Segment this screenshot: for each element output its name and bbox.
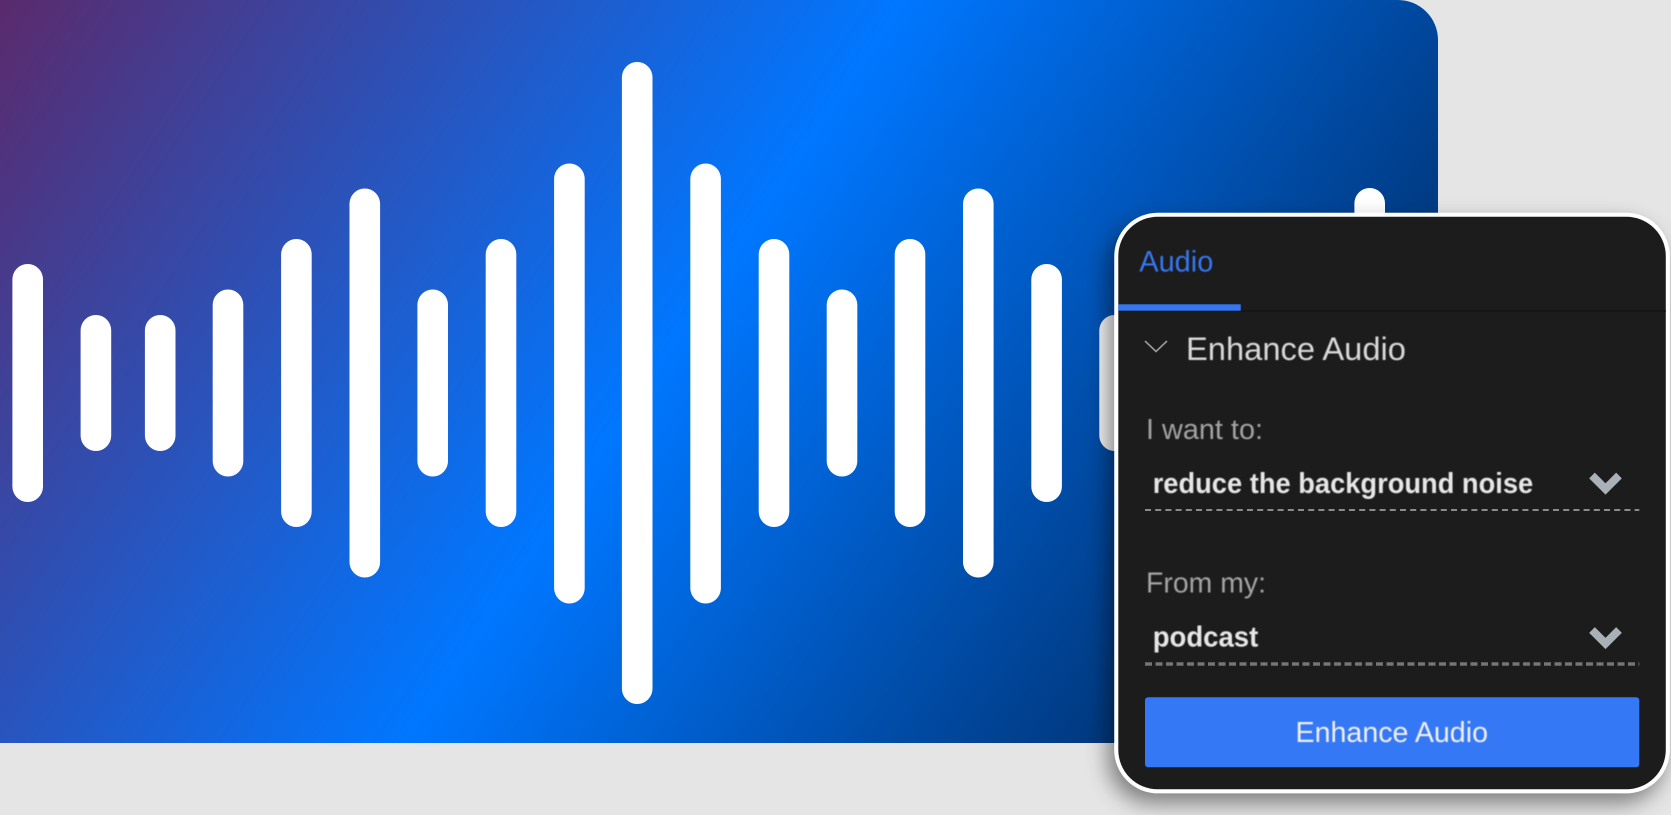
dropdown underline	[1145, 662, 1639, 666]
panel: audio settings	[1116, 215, 1668, 791]
panel: gradient background card	[0, 0, 1438, 743]
panel background	[1116, 215, 1668, 791]
icon: section chevron	[1145, 341, 1167, 352]
field label: I want to: I want to:	[1146, 414, 1263, 446]
tab divider	[1118, 310, 1666, 312]
dropdown value: reduce the background noise: reduce the background noise	[1153, 468, 1533, 500]
tab label: Audio: Audio	[1139, 246, 1213, 279]
button: Enhance Audio	[1145, 697, 1639, 767]
chart: audio waveform bars	[12, 62, 1385, 704]
button: Enhance Audio: Enhance Audio	[1296, 717, 1488, 749]
section heading: Enhance Audio: Enhance Audio	[1186, 331, 1406, 367]
active tab underline	[1118, 304, 1241, 311]
icon: dropdown chevron	[1592, 476, 1619, 489]
dropdown underline	[1145, 509, 1639, 511]
field label: From my: From my:	[1146, 568, 1266, 600]
icon: dropdown chevron	[1592, 630, 1619, 644]
dropdown value: podcast: podcast	[1153, 622, 1259, 654]
